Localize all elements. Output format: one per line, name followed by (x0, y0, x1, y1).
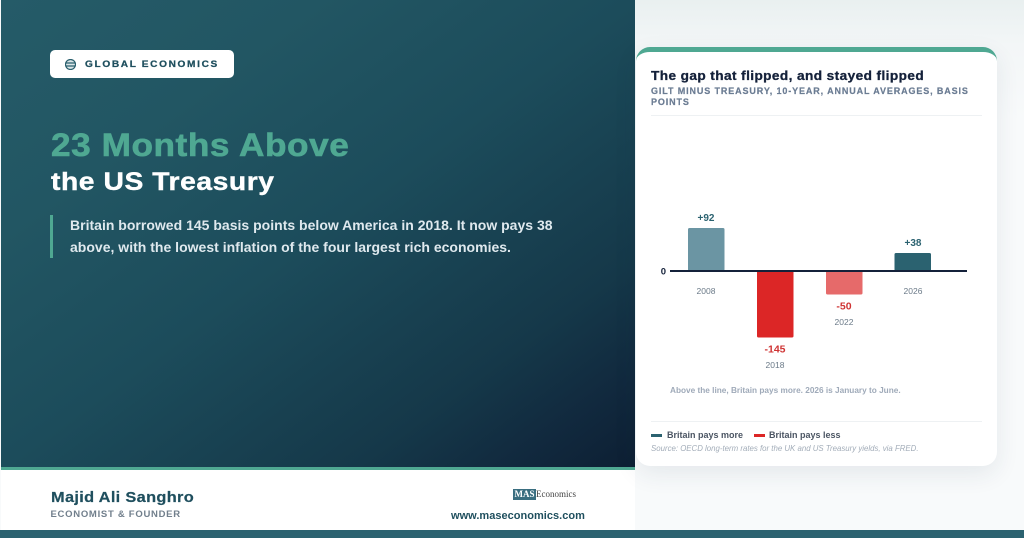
chart note: Above the line, Britain pays more. 2026 is January to June. (670, 386, 901, 395)
footer divider (651, 421, 982, 422)
bar 2008: +92 (698, 213, 715, 224)
bottom bar (0, 530, 1024, 538)
panel: left hero (1, 0, 635, 467)
accent bar (50, 215, 53, 258)
legend label: pays more: Britain pays more (667, 430, 743, 440)
title line 1: 23 Months Above (51, 127, 349, 163)
website: www.maseconomics.com (451, 510, 585, 522)
logo (513, 489, 576, 500)
bar 2022 (826, 270, 862, 327)
bar chart (661, 213, 967, 370)
footer accent line (1, 467, 635, 470)
badge label: GLOBAL ECONOMICS (85, 59, 219, 70)
summary text: Britain borrowed 145 basis points below America in 2018. It now pays 38 (70, 217, 553, 233)
panel: chart card (636, 47, 997, 466)
summary text: above, with the lowest inflation of the four largest rich economies. (70, 238, 511, 254)
card subheading: GILT MINUS TREASURY, 10-YEAR, ANNUAL AVERAGES, BASIS (651, 86, 969, 96)
card heading: The gap that flipped, and stayed flipped (651, 68, 924, 83)
card subheading (651, 86, 969, 106)
bar 2026: 2026 (904, 286, 923, 296)
bar 2026: +38 (905, 238, 922, 249)
bar 2026 (894, 238, 931, 296)
bar 2022: 2022 (835, 317, 854, 327)
legend swatch: pays less (754, 434, 765, 436)
bar 2022: -50 (836, 300, 852, 312)
bar 2018: -145 (764, 344, 786, 356)
zero axis: 0 (661, 266, 666, 278)
bar 2018: 2018 (766, 360, 785, 370)
badge: global economics (50, 50, 234, 78)
title line 2: the US Treasury (51, 168, 275, 196)
legend swatch: pays more (651, 434, 662, 436)
panel: right background (635, 0, 1024, 530)
header divider (651, 115, 982, 116)
legend label: pays less: Britain pays less (769, 430, 841, 440)
author name: Majid Ali Sanghro (51, 489, 194, 506)
icon: globe (65, 59, 76, 70)
summary text (70, 217, 553, 255)
bar 2018 (757, 270, 794, 370)
footer strip (1, 467, 635, 530)
card subheading: POINTS (651, 96, 690, 106)
source: Source: OECD long-term rates for the UK and US Treasury yields, via FRED. (651, 444, 919, 453)
author role: ECONOMIST & FOUNDER (50, 509, 181, 520)
bar 2008 (688, 213, 724, 296)
bar 2008: 2008 (697, 286, 716, 296)
logo mark: MAS (514, 489, 534, 499)
legend (651, 430, 841, 440)
logo word: Economics (536, 489, 576, 499)
